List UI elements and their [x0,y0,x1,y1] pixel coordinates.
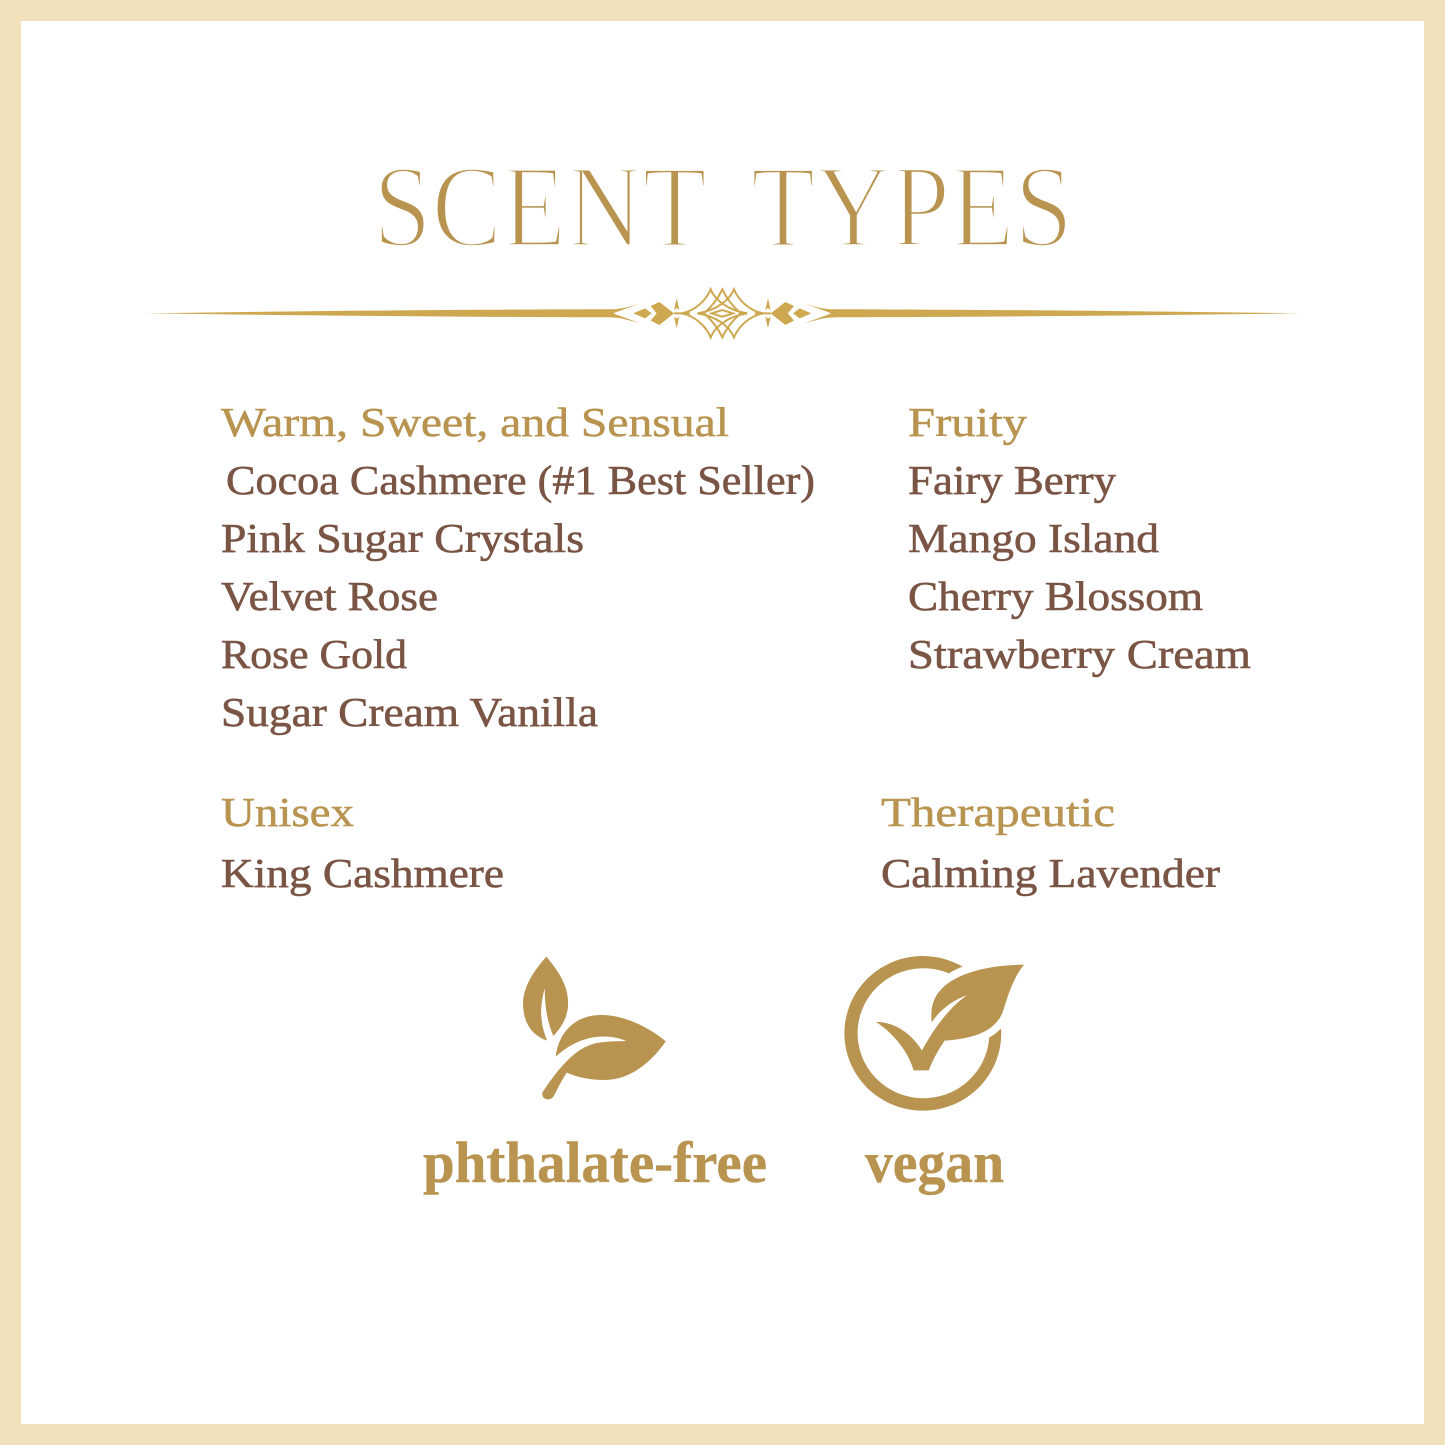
panel: therapeutic [881,789,1220,896]
heading: Therapeutic [881,789,1115,835]
heading: Warm, Sweet, and Sensual [221,399,729,445]
label: phthalate-free: phthalate-free [423,1130,767,1195]
title: SCENT TYPES [373,141,1073,272]
list item: Velvet Rose [221,573,438,619]
list item: Cherry Blossom [908,573,1203,619]
list item: Calming Lavender [881,850,1220,896]
list item: Cocoa Cashmere (#1 Best Seller) [226,457,815,503]
list item: King Cashmere [221,850,504,896]
label: vegan: vegan [865,1130,1004,1195]
ornamental divider [145,289,1300,337]
panel: unisex [221,789,504,896]
list item: Sugar Cream Vanilla [221,689,598,735]
icon: vegan check with leaf [844,956,1024,1111]
list item: Mango Island [908,515,1159,561]
icon: phthalate-free leaves [523,957,666,1099]
list item: Pink Sugar Crystals [221,515,584,561]
list item: Rose Gold [221,631,407,677]
panel: warm, sweet, and sensual [221,399,815,735]
list item: Strawberry Cream [908,631,1251,677]
heading: Unisex [221,789,354,835]
heading: Fruity [908,399,1028,445]
list item: Fairy Berry [908,457,1117,503]
panel: fruity [908,399,1251,677]
